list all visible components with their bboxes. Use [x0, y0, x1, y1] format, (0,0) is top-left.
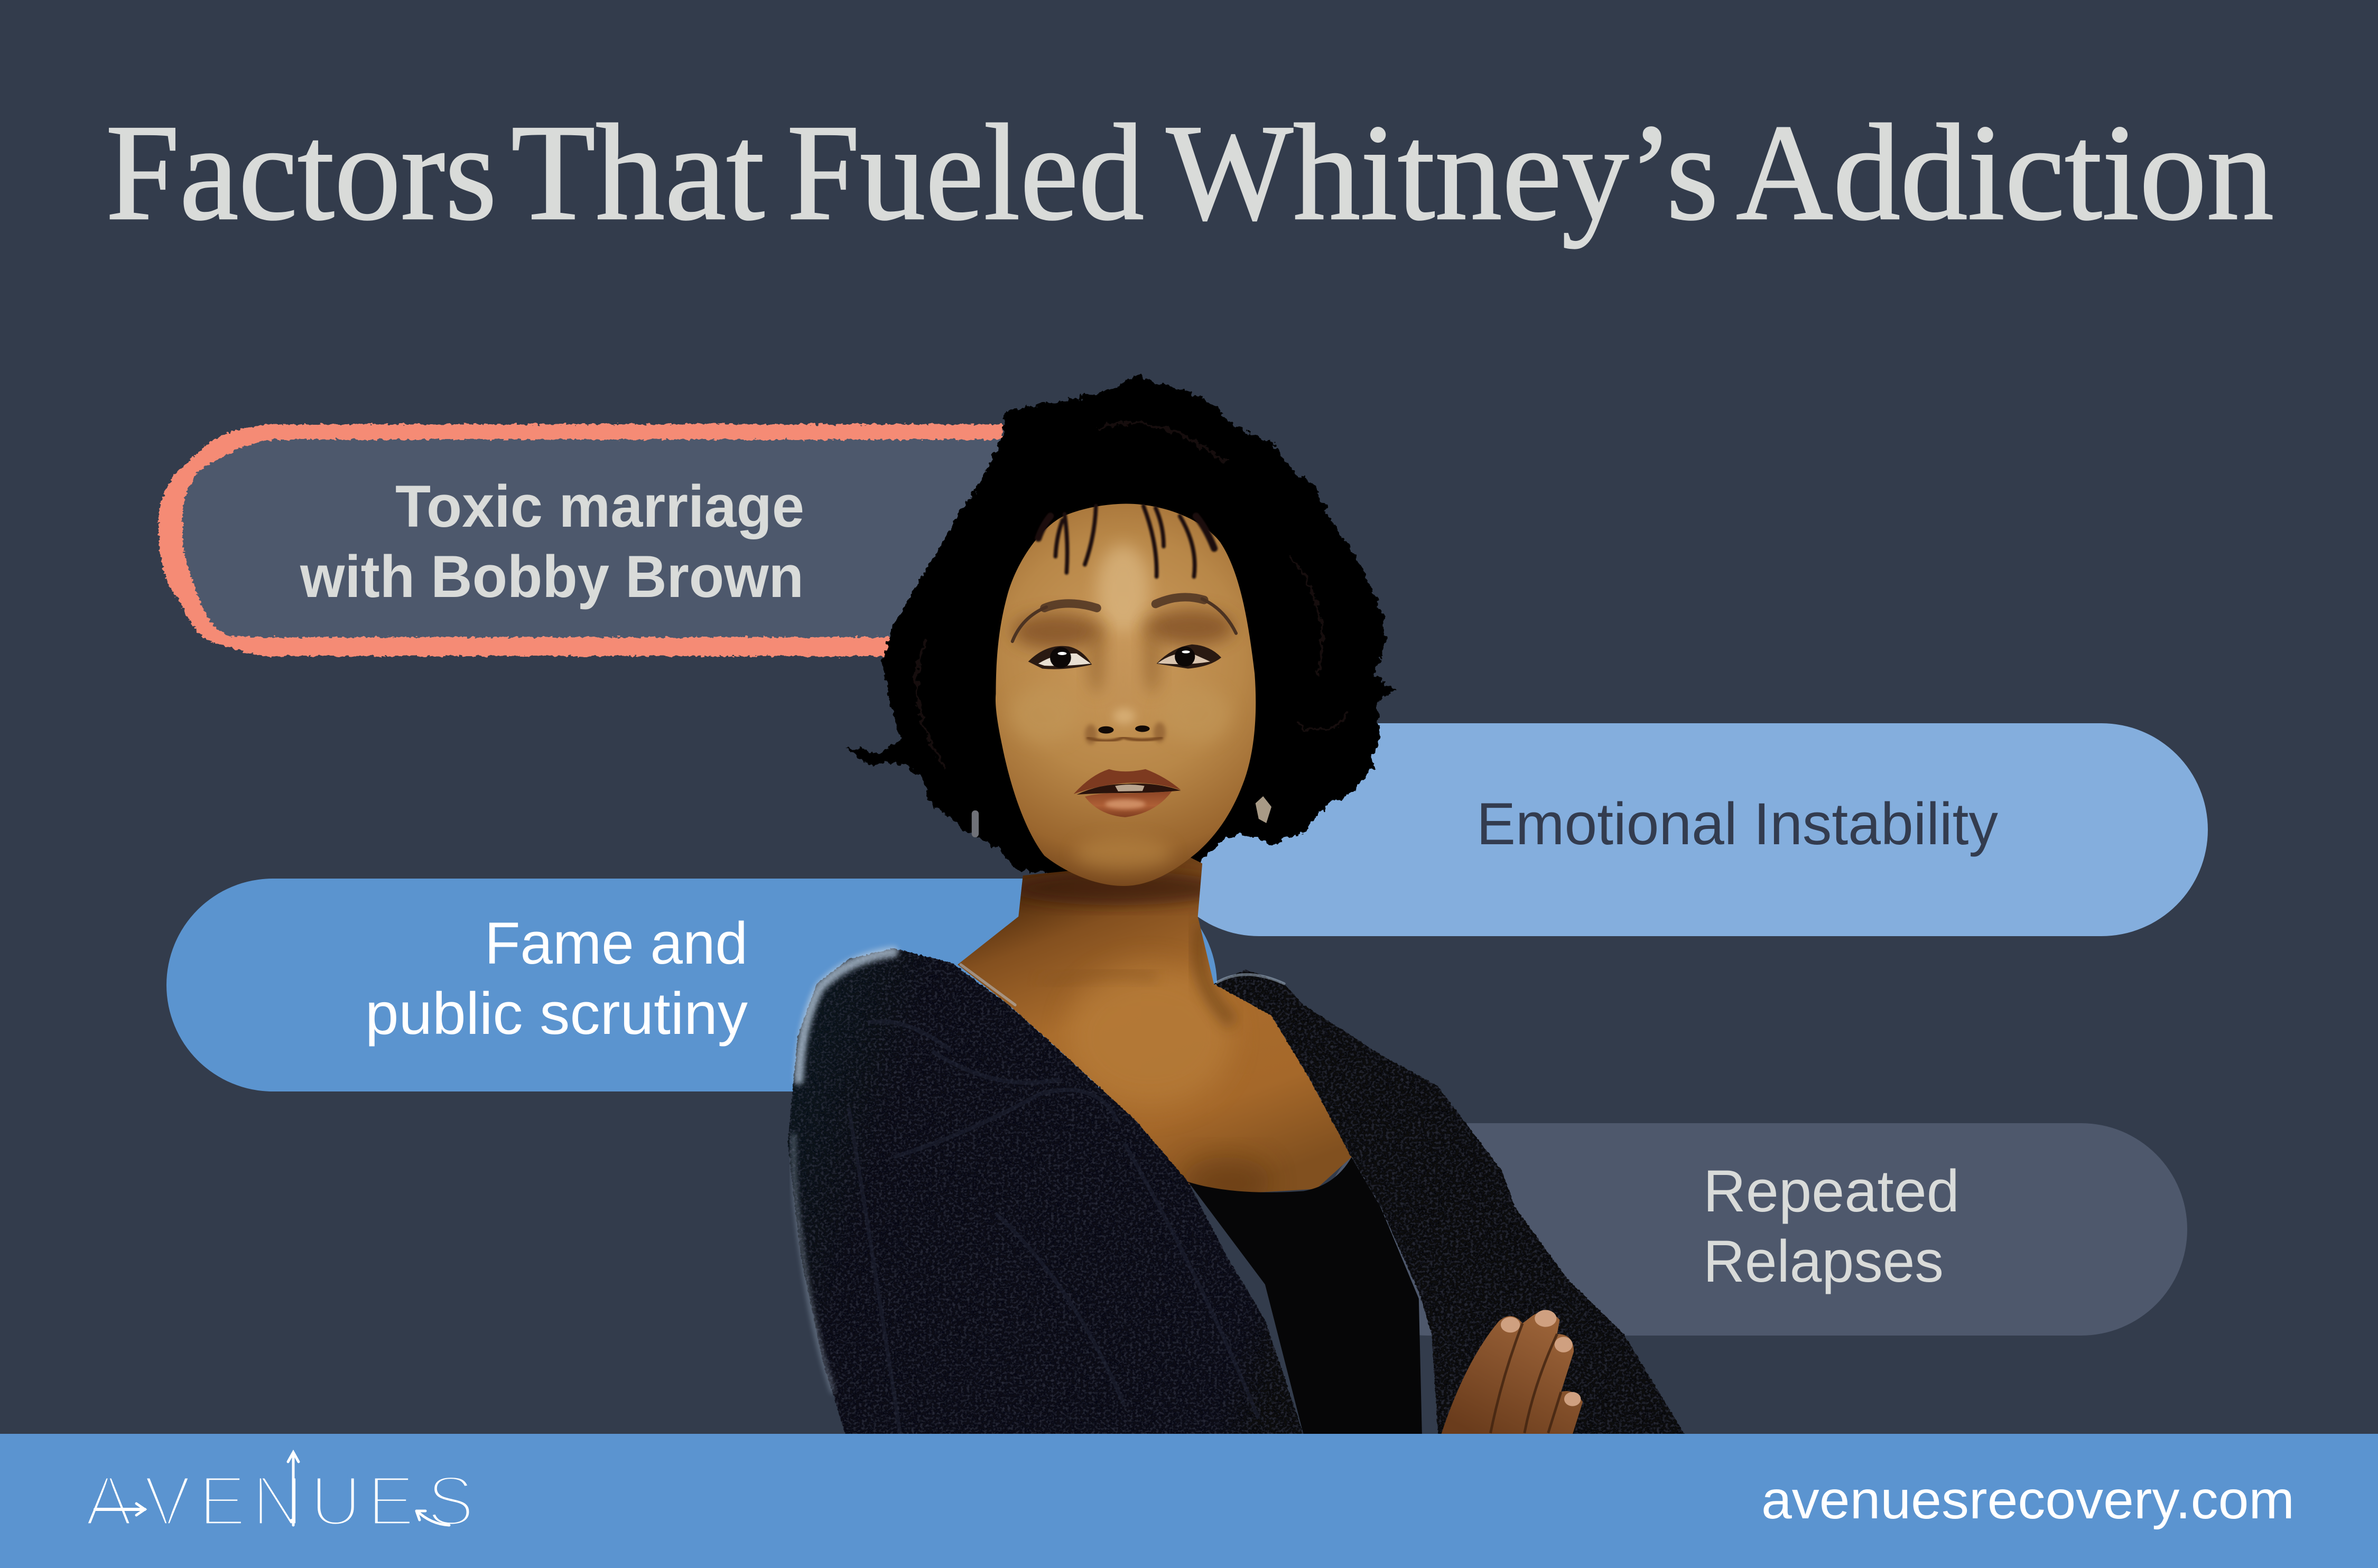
eyes — [1028, 645, 1221, 669]
portrait illustration of Whitney Houston — [788, 375, 1685, 1434]
face — [996, 503, 1256, 886]
panel: repeated relapses: Relapses — [1703, 1228, 1944, 1294]
cardigan — [788, 948, 1685, 1434]
body, hair and hand — [788, 375, 1685, 1434]
panel: fame and public scrutiny: public scrutiny — [365, 981, 748, 1047]
title: Whitney’s — [1166, 96, 1719, 249]
logo: Avenues: AVENUES — [85, 1462, 474, 1541]
nose — [1085, 708, 1166, 744]
title: Addiction — [1736, 96, 2274, 249]
label text — [300, 473, 804, 610]
lips — [1074, 769, 1181, 817]
face shape — [996, 503, 1256, 886]
title: Fueled — [787, 96, 1144, 249]
panel: repeated relapses: Repeated — [1703, 1158, 1959, 1224]
facial shading — [1010, 544, 1234, 870]
shoulder rim light — [794, 952, 1284, 1390]
title: That — [511, 96, 765, 249]
website url: avenuesrecovery.com — [1761, 1470, 2295, 1530]
hand — [1441, 1310, 1583, 1434]
panel: repeated relapses — [1321, 1123, 2187, 1336]
eyebrows — [1012, 597, 1236, 641]
black top — [1188, 1157, 1422, 1434]
chest shading — [1009, 871, 1271, 1207]
footer bar — [0, 1434, 2378, 1568]
hair — [846, 375, 1396, 888]
title — [106, 96, 2274, 249]
fringe strands — [1038, 506, 1214, 577]
cardigan cable pattern — [849, 1021, 1259, 1433]
panel: toxic marriage with Bobby Brown — [159, 424, 1057, 656]
panel: fame and public scrutiny — [166, 879, 1217, 1091]
label text: with Bobby Brown — [300, 544, 804, 610]
coral hand-drawn outline — [159, 424, 1004, 656]
pill fill — [183, 440, 1057, 637]
earrings — [972, 796, 1271, 837]
panel: fame and public scrutiny: Fame and — [485, 910, 748, 976]
panel: emotional instability: Emotional Instability — [1476, 791, 1998, 857]
logo arrows — [95, 1452, 449, 1525]
panel: emotional instability — [1153, 723, 2208, 936]
label text: Toxic marriage — [395, 473, 804, 539]
title: Factors — [106, 96, 497, 249]
neck and chest — [958, 856, 1352, 1194]
